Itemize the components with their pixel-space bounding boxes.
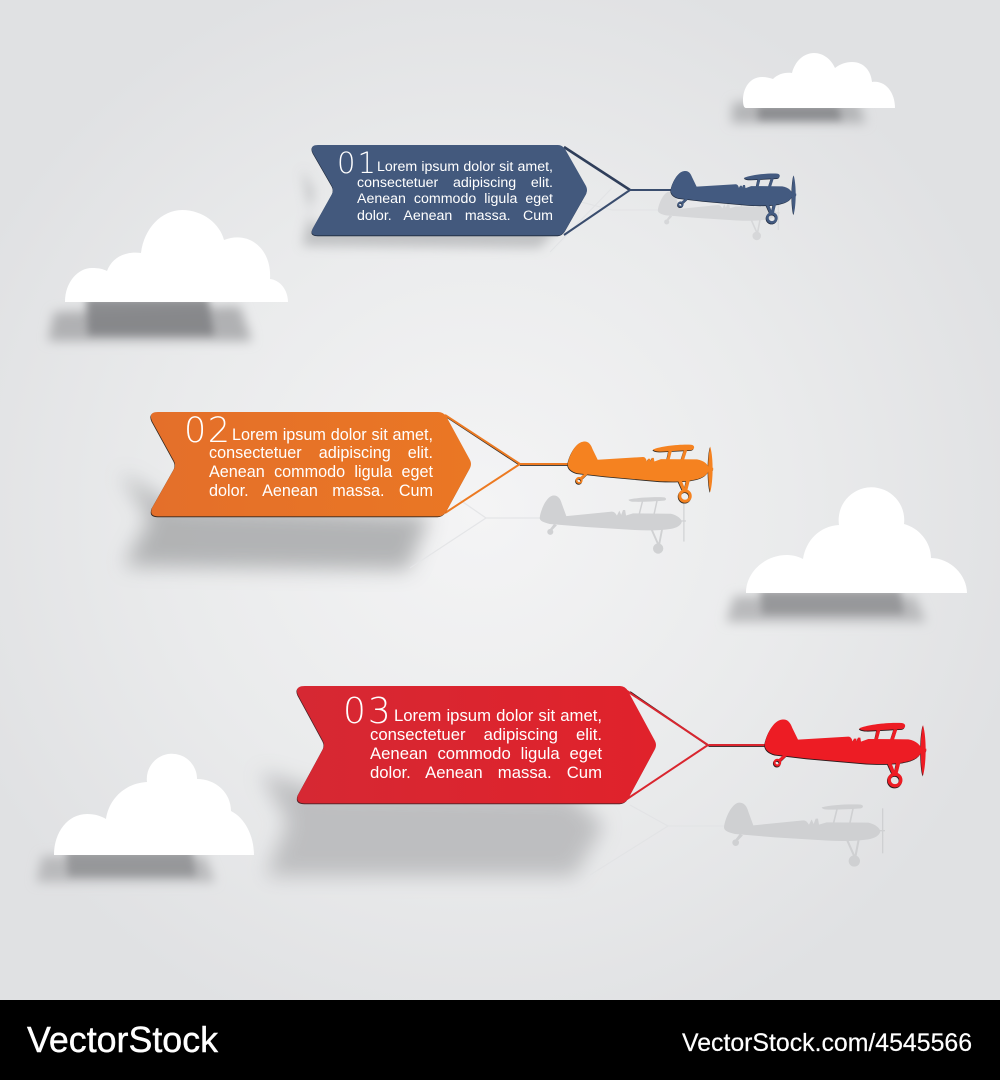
cloud bottom left with shadow	[36, 754, 254, 882]
plane 01	[670, 171, 796, 223]
text block 03	[370, 706, 602, 786]
footer logo: VectorStock	[27, 1020, 218, 1060]
text block 03: consectetuer adipiscing elit.	[370, 724, 602, 744]
number 03: 03	[343, 691, 393, 732]
footer image id: VectorStock.com/4545566	[682, 1030, 972, 1057]
banner 02 ribbon	[150, 412, 471, 517]
cloud left with shadow	[48, 210, 288, 341]
cloud right with shadow	[726, 487, 967, 622]
banner 03 ribbon	[296, 686, 656, 804]
banner 02 group	[120, 411, 713, 570]
text block 03: Lorem ipsum dolor sit amet,	[394, 706, 602, 724]
plane 02	[567, 442, 713, 502]
text block 01: dolor. Aenean massa. Cum	[357, 208, 553, 224]
footer bar	[0, 1000, 1000, 1080]
text block 02: dolor. Aenean massa. Cum	[209, 482, 433, 500]
text block 02: Aenean commodo ligula eget	[209, 463, 433, 481]
number 01: 01	[337, 146, 378, 180]
banner 02 shadow	[120, 472, 686, 570]
text block 02: Lorem ipsum dolor sit amet,	[232, 426, 433, 444]
banner 03 group	[260, 686, 926, 876]
text block 02: consectetuer adipiscing elit.	[209, 444, 433, 462]
banner 01 tow ropes	[564, 147, 672, 235]
text block 01: consectetuer adipiscing elit.	[357, 175, 553, 191]
text block 02	[209, 426, 433, 502]
banner 01 shadow	[302, 168, 780, 252]
number 02: 02	[184, 411, 232, 451]
banner 01 group	[302, 145, 796, 252]
banner 02 tow ropes	[445, 415, 570, 513]
banner 01 ribbon	[311, 145, 587, 236]
text block 01: Lorem ipsum dolor sit amet,	[377, 159, 553, 175]
cloud top right with shadow	[731, 53, 895, 123]
banner 03 tow ropes	[627, 691, 766, 799]
banner 03 shadow	[260, 772, 885, 876]
text block 03: Aenean commodo ligula eget	[370, 744, 602, 762]
text block 01	[357, 159, 553, 225]
text block 03: dolor. Aenean massa. Cum	[370, 762, 602, 782]
plane 03	[764, 720, 926, 787]
text block 01: Aenean commodo ligula eget	[357, 191, 553, 207]
